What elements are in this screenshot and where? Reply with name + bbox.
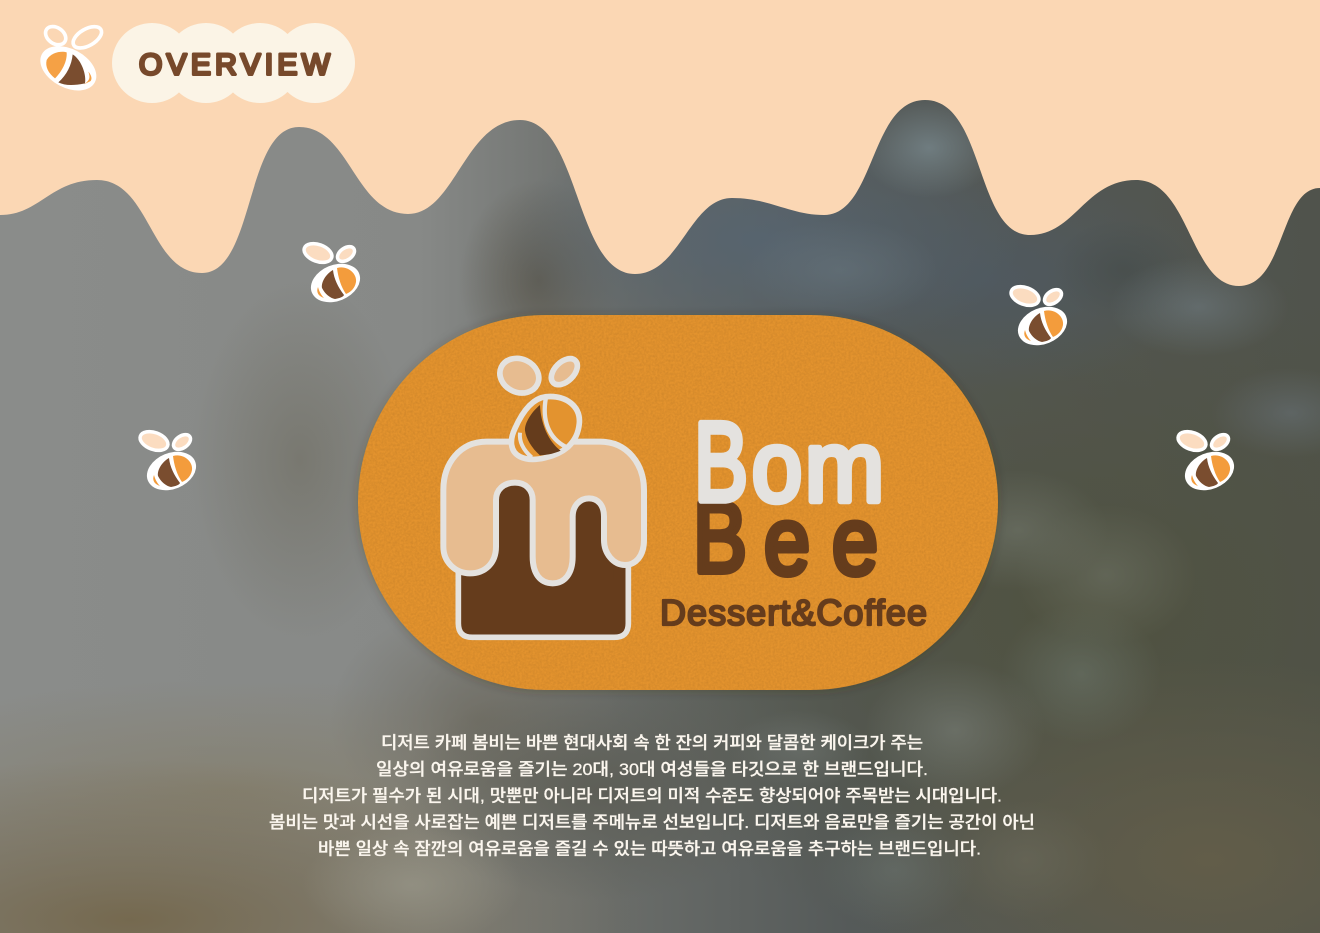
- logo text: Bom: o: [752, 411, 802, 523]
- floating bee: upper right: [1008, 283, 1073, 352]
- text block: brand description: 봄비는 맛과 시선을 사로잡는 예쁜 디저트를 주메뉴로 선보입니다. 디저트와 음료만을 즐기는 공간이 아닌: [269, 813, 1035, 832]
- text block: brand description: 일상의 여유로움을 즐기는 20대, 30대 여성들을 타깃으로 한 브랜드입니다.: [376, 760, 928, 779]
- logo text: Bee: [693, 482, 878, 595]
- overview heading pill: OVERVIEW: [139, 48, 331, 82]
- text block: brand description: 디저트 카페 봄비는 바쁜 현대사회 속 한 잔의 커피와 달콤한 케이크가 주는: [381, 734, 923, 752]
- floating bee: right: [1175, 428, 1240, 497]
- overview heading pill: [112, 23, 355, 103]
- logo text: Bee: e: [832, 488, 878, 595]
- logo text: Bee: B: [693, 482, 747, 594]
- logo text: Dessert&Coffee: Dessert&Coffee: [660, 592, 927, 633]
- logo text: Bom: m: [805, 411, 884, 523]
- icon: cake with bee: [443, 352, 644, 637]
- text block: brand description: 바쁜 일상 속 잠깐의 여유로움을 즐길 수 있는 따뜻하고 여유로움을 추구하는 브랜드입니다.: [318, 840, 981, 858]
- logo text: Bom: [694, 400, 884, 524]
- panel: orange logo badge: [358, 315, 998, 690]
- floating bee: left: [137, 428, 202, 497]
- header bee icon: [33, 22, 105, 99]
- logo text: Bom: B: [694, 400, 748, 524]
- top peach wave header: [0, 0, 1320, 286]
- text block: brand description: [269, 734, 1035, 858]
- floating bee: upper left: [301, 240, 366, 309]
- text block: brand description: 디저트가 필수가 된 시대, 맛뿐만 아니라 디저트의 미적 수준도 향상되어야 주목받는 시대입니다.: [302, 786, 1002, 806]
- logo text: Bee: e: [764, 488, 810, 595]
